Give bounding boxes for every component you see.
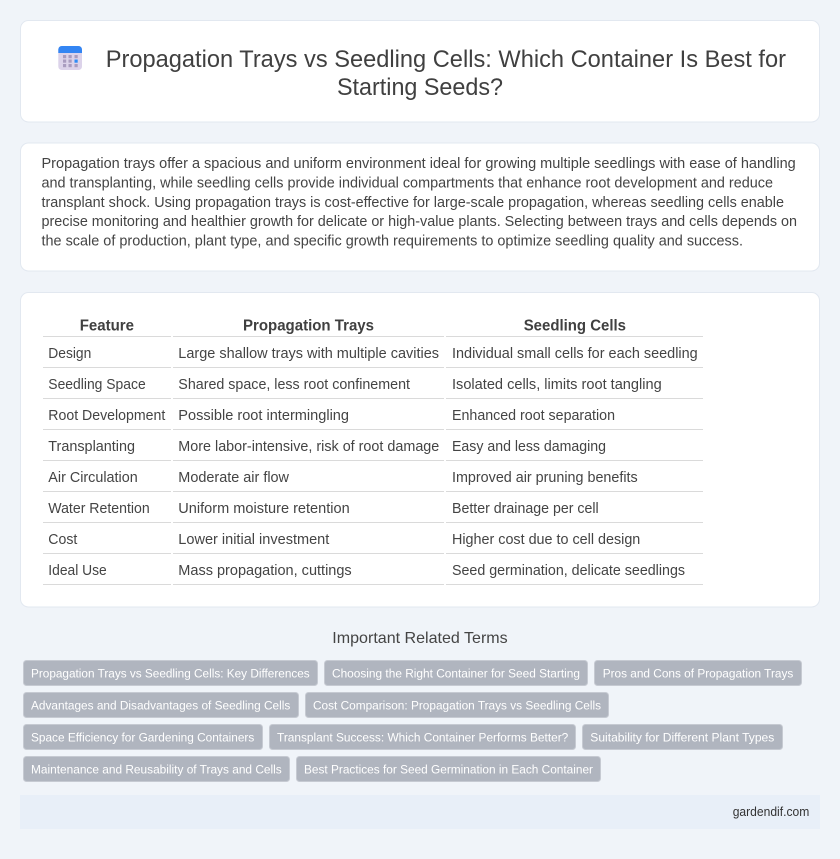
row: Ideal Use: Seed germination, delicate seedlings bbox=[452, 563, 685, 579]
row: Root Development: Possible root intermingling bbox=[178, 408, 349, 424]
table header row: Propagation Trays bbox=[243, 318, 374, 335]
tag: suitability bbox=[582, 724, 782, 750]
table header row bbox=[80, 318, 626, 335]
row: Ideal Use bbox=[48, 563, 685, 579]
row: Design: Design bbox=[48, 346, 91, 362]
tag: cost comparison: Cost Comparison: Propagation Trays vs Seedling Cells bbox=[313, 698, 601, 712]
row: Transplanting: Easy and less damaging bbox=[452, 439, 606, 455]
tag: best practices: Best Practices for Seed Germination in Each Container bbox=[304, 762, 593, 776]
intro paragraph bbox=[42, 156, 797, 250]
table header row: Feature bbox=[80, 318, 134, 335]
tag: maintenance bbox=[24, 756, 290, 782]
icon: calendar tray bbox=[58, 46, 82, 70]
tag: choosing container bbox=[324, 660, 588, 686]
tag: suitability: Suitability for Different Plant Types bbox=[590, 730, 774, 744]
row: Cost: Cost bbox=[48, 532, 77, 548]
title: Propagation Trays vs Seedling Cells: Which Container Is Best for bbox=[106, 46, 786, 73]
tag: space efficiency bbox=[24, 724, 262, 750]
row: Water Retention: Water Retention bbox=[48, 501, 150, 517]
row: Air Circulation bbox=[48, 470, 638, 486]
tag: key differences: Propagation Trays vs Seedling Cells: Key Differences bbox=[31, 666, 310, 680]
row: Cost bbox=[48, 532, 640, 548]
intro paragraph: precise monitoring and healthier growth for delicate or high-value plants. Selecting between trays and cells depends on bbox=[42, 214, 797, 230]
footer source text: gardendif.com bbox=[733, 804, 809, 819]
row: Water Retention: Better drainage per cell bbox=[452, 501, 599, 517]
row: Water Retention bbox=[48, 501, 599, 517]
table header row: Seedling Cells bbox=[524, 318, 626, 335]
row: Air Circulation: Moderate air flow bbox=[178, 470, 290, 486]
row: Seedling Space: Seedling Space bbox=[48, 377, 146, 393]
row: Seedling Space bbox=[48, 377, 662, 393]
tag: pros and cons: Pros and Cons of Propagation Trays bbox=[603, 666, 793, 680]
tag: best practices bbox=[296, 756, 600, 782]
related terms tags bbox=[24, 660, 802, 782]
row: Air Circulation: Air Circulation bbox=[48, 470, 138, 486]
tag: advantages: Advantages and Disadvantages of Seedling Cells bbox=[31, 698, 290, 712]
tag: key differences bbox=[24, 660, 318, 686]
row: Water Retention: Uniform moisture retention bbox=[178, 501, 350, 517]
row: Seedling Space: Isolated cells, limits root tangling bbox=[452, 377, 662, 393]
tag: advantages bbox=[24, 692, 298, 718]
intro paragraph: and transplanting, while seedling cells provide individual compartments that enhance root development and reduce bbox=[42, 175, 773, 191]
tag: transplant success: Transplant Success: Which Container Performs Better? bbox=[277, 730, 569, 744]
row: Root Development: Enhanced root separation bbox=[452, 408, 615, 424]
row: Design: Individual small cells for each seedling bbox=[452, 346, 698, 362]
row: Design bbox=[48, 346, 698, 362]
row: Ideal Use: Ideal Use bbox=[48, 563, 107, 579]
row: Design: Large shallow trays with multiple cavities bbox=[178, 346, 439, 362]
row: Ideal Use: Mass propagation, cuttings bbox=[178, 563, 352, 579]
tag: cost comparison bbox=[306, 692, 608, 718]
panel: introduction text bbox=[20, 143, 820, 271]
title bbox=[106, 46, 786, 101]
row: Seedling Space: Shared space, less root confinement bbox=[178, 377, 410, 393]
row: Air Circulation: Improved air pruning benefits bbox=[452, 470, 638, 486]
row: Root Development bbox=[48, 408, 615, 424]
intro paragraph: transplant shock. Using propagation trays is cost-effective for large-scale propagation, whereas seedling cells enable bbox=[42, 195, 784, 211]
tag: transplant success bbox=[270, 724, 576, 750]
tag: space efficiency: Space Efficiency for Gardening Containers bbox=[31, 730, 254, 744]
tag: pros and cons bbox=[594, 660, 802, 686]
intro paragraph: the scale of production, plant type, and specific growth requirements to optimize seedling quality and success. bbox=[42, 234, 743, 250]
panel: comparison table bbox=[20, 292, 820, 607]
intro paragraph: Propagation trays offer a spacious and uniform environment ideal for growing multiple seedlings with ease of handling bbox=[42, 156, 796, 172]
row: Transplanting: Transplanting bbox=[48, 439, 135, 455]
panel: title header bbox=[20, 20, 820, 122]
row: Transplanting: More labor-intensive, risk of root damage bbox=[178, 439, 439, 455]
row: Cost: Lower initial investment bbox=[178, 532, 329, 548]
footer bar bbox=[20, 795, 820, 829]
tag: choosing container: Choosing the Right Container for Seed Starting bbox=[332, 666, 580, 680]
tag: maintenance: Maintenance and Reusability of Trays and Cells bbox=[31, 762, 282, 776]
row: Cost: Higher cost due to cell design bbox=[452, 532, 640, 548]
title: Starting Seeds? bbox=[337, 74, 503, 101]
row: Transplanting bbox=[48, 439, 606, 455]
row: Root Development: Root Development bbox=[48, 408, 165, 424]
heading: important related terms: Important Related Terms bbox=[332, 630, 508, 647]
